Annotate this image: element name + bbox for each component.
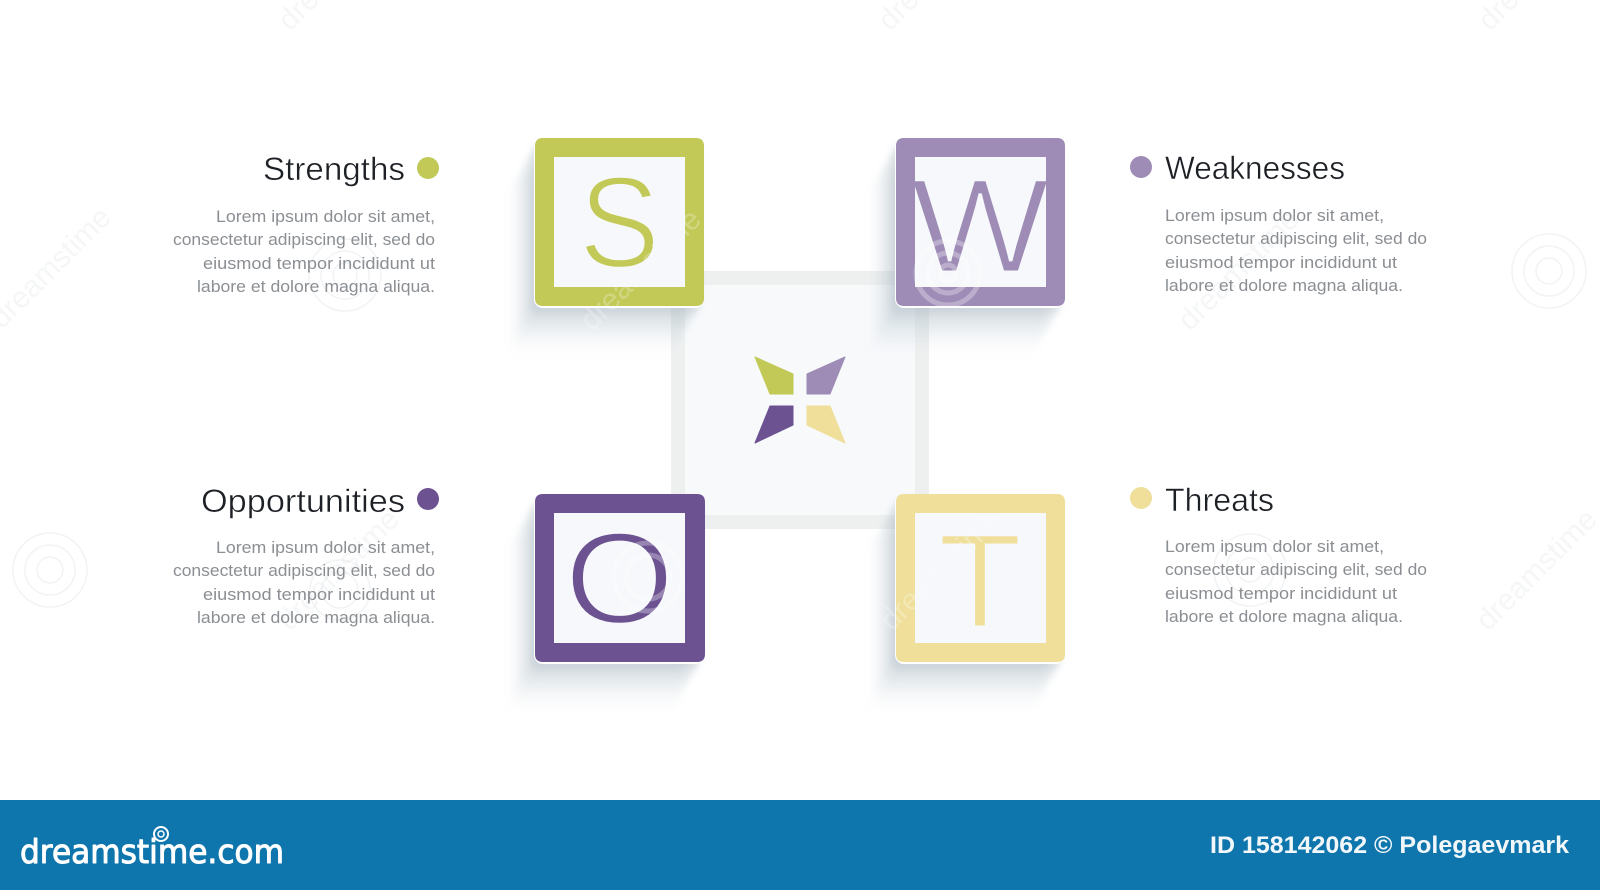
card: W (Weaknesses): W bbox=[910, 152, 1050, 301]
watermark text: dreamstime bbox=[1172, 203, 1306, 337]
text block: Threats: Lorem ipsum dolor sit amet, bbox=[1165, 538, 1384, 556]
card: W (Weaknesses) bbox=[868, 138, 1065, 355]
card watermark overlay: dreamstime bbox=[574, 203, 708, 337]
card watermark overlay: dreamstime bbox=[874, 503, 1008, 637]
text block: Weaknesses: eiusmod tempor incididunt ut bbox=[1165, 254, 1397, 272]
panel: central square bbox=[671, 271, 929, 529]
watermark rings bbox=[13, 234, 1586, 620]
card: T (Threats): T bbox=[938, 507, 1022, 656]
icon: four-petal centre mark bbox=[755, 357, 845, 443]
text block: Weaknesses bbox=[1130, 150, 1427, 295]
watermark text: dreamstime bbox=[272, 503, 406, 637]
text block: Weaknesses: labore et dolore magna aliqua. bbox=[1165, 277, 1403, 295]
watermark text bbox=[0, 0, 1600, 637]
footer bar bbox=[0, 800, 1600, 890]
text block: Threats: consectetur adipiscing elit, sed do bbox=[1165, 561, 1427, 579]
text block: Threats: Threats bbox=[1165, 482, 1274, 518]
text block: Strengths: eiusmod tempor incididunt ut bbox=[203, 255, 435, 273]
text block: Opportunities bbox=[173, 483, 439, 627]
text block: Opportunities: consectetur adipiscing elit, sed do bbox=[173, 562, 435, 580]
text block: Opportunities: eiusmod tempor incididunt ut bbox=[203, 586, 435, 604]
text block: Threats: eiusmod tempor incididunt ut bbox=[1165, 585, 1397, 603]
watermark text: dreamstime bbox=[1470, 503, 1600, 637]
text block: Strengths: labore et dolore magna aliqua. bbox=[197, 278, 435, 296]
text block: Opportunities: Lorem ipsum dolor sit amet, bbox=[216, 539, 435, 557]
text block: Strengths: Lorem ipsum dolor sit amet, bbox=[216, 208, 435, 226]
text block: Threats: labore et dolore magna aliqua. bbox=[1165, 608, 1403, 626]
card: O (Opportunities): O bbox=[564, 505, 674, 651]
footer logo: dreamstime.com: dreamstime.com bbox=[20, 832, 284, 871]
text block: Weaknesses: Lorem ipsum dolor sit amet, bbox=[1165, 207, 1384, 225]
card: O (Opportunities) bbox=[507, 494, 705, 711]
footer credit: ID 158142062 © Polegaevmark bbox=[1210, 832, 1570, 859]
card: T (Threats) bbox=[868, 494, 1065, 711]
card: S (Strengths) bbox=[507, 138, 704, 355]
card watermark overlay bbox=[574, 203, 1008, 637]
card: S (Strengths): S bbox=[579, 149, 660, 295]
text block: Weaknesses: Weaknesses bbox=[1165, 150, 1345, 186]
text block: Strengths: Strengths bbox=[263, 151, 405, 187]
text block: Strengths bbox=[173, 151, 439, 296]
text block: Strengths: consectetur adipiscing elit, sed do bbox=[173, 231, 435, 249]
text block: Weaknesses: consectetur adipiscing elit, sed do bbox=[1165, 230, 1427, 248]
text block: Threats bbox=[1130, 482, 1427, 626]
text block: Opportunities: labore et dolore magna aliqua. bbox=[197, 609, 435, 627]
text block: Opportunities: Opportunities bbox=[201, 483, 405, 519]
